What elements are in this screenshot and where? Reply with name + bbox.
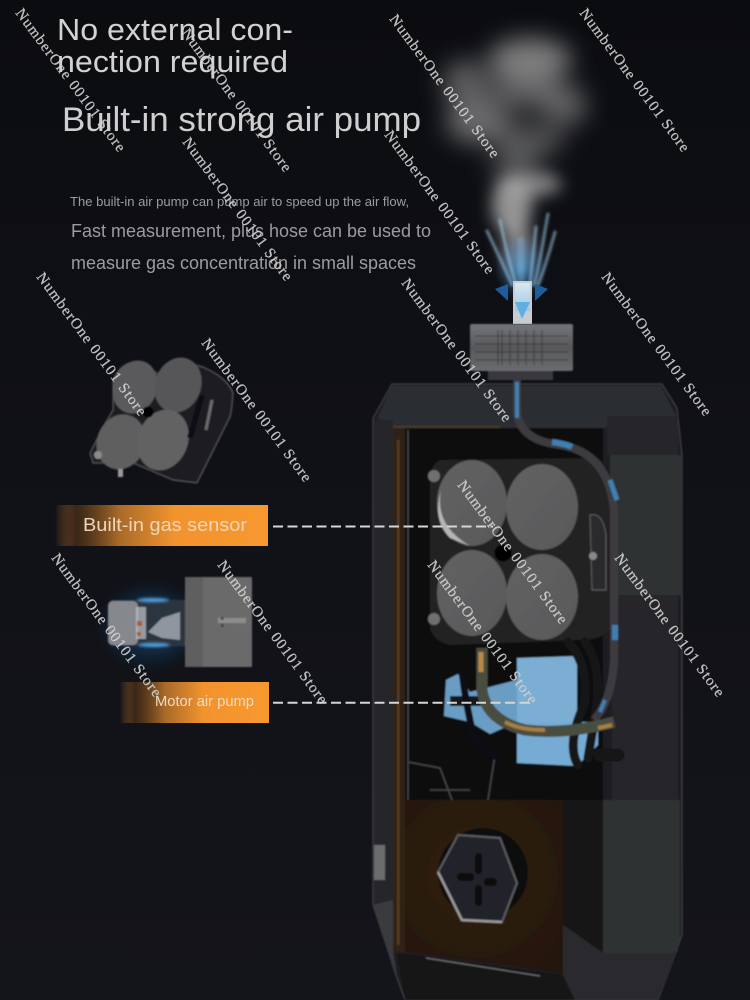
store watermarks: NumberOne 00101 Store xyxy=(454,478,570,628)
store watermarks: NumberOne 00101 Store xyxy=(214,558,330,708)
store watermarks: NumberOne 00101 Store xyxy=(198,336,314,486)
device shell xyxy=(373,384,682,1000)
inner dark cavity xyxy=(393,428,603,800)
blue air pump block xyxy=(444,656,598,766)
bottom shell edge xyxy=(397,953,575,1000)
store watermarks: NumberOne 00101 Store xyxy=(33,270,149,420)
store watermarks: NumberOne 00101 Store xyxy=(178,26,294,176)
store watermarks: NumberOne 00101 Store xyxy=(48,551,164,701)
description text xyxy=(70,195,431,273)
store watermarks: NumberOne 00101 Store xyxy=(424,558,540,708)
side arrows xyxy=(495,284,548,301)
title: nection required xyxy=(57,44,288,79)
sensor backplate xyxy=(430,458,612,645)
description text: The built-in air pump can pump air to speed up the air flow, xyxy=(70,195,409,209)
gas sensor label: Built-in gas sensor xyxy=(83,514,247,535)
heading: Built-in strong air pump xyxy=(62,101,421,139)
gas sensor label xyxy=(55,505,268,546)
gas sensor module photo xyxy=(89,351,233,483)
description text: measure gas concentration in small spaces xyxy=(71,253,416,273)
motor pump leader line xyxy=(273,702,533,704)
motor air pump label: Motor air pump xyxy=(155,694,254,710)
store watermarks xyxy=(12,6,727,708)
store watermarks: NumberOne 00101 Store xyxy=(179,135,295,285)
store watermarks: NumberOne 00101 Store xyxy=(598,270,714,420)
title: No external con- xyxy=(57,12,293,47)
air hose with blue arrows xyxy=(517,380,617,720)
gas sensor discs xyxy=(428,460,606,640)
air nozzle with arrow xyxy=(513,281,532,324)
air jet streaks xyxy=(487,214,555,324)
store watermarks: NumberOne 00101 Store xyxy=(386,12,502,162)
store watermarks: NumberOne 00101 Store xyxy=(381,128,497,278)
smoke plume xyxy=(442,38,587,276)
black wires xyxy=(568,642,618,765)
main device xyxy=(373,324,682,1000)
outer shell facets xyxy=(373,386,682,1000)
bottom socket xyxy=(438,828,528,922)
cap knob xyxy=(470,324,573,380)
store watermarks: NumberOne 00101 Store xyxy=(398,276,514,426)
orange return hose xyxy=(481,648,614,731)
lower board details xyxy=(408,755,495,800)
motor air pump label xyxy=(120,682,269,723)
store watermarks: NumberOne 00101 Store xyxy=(576,6,692,156)
store watermarks: NumberOne 00101 Store xyxy=(12,6,128,156)
description text: Fast measurement, plus hose can be used to xyxy=(71,221,431,241)
lower amber cavity xyxy=(393,800,563,973)
gas sensor leader line xyxy=(273,526,493,528)
title xyxy=(57,12,293,79)
amber edge strip xyxy=(393,428,405,953)
motor air pump photo xyxy=(106,577,252,667)
store watermarks: NumberOne 00101 Store xyxy=(611,551,727,701)
